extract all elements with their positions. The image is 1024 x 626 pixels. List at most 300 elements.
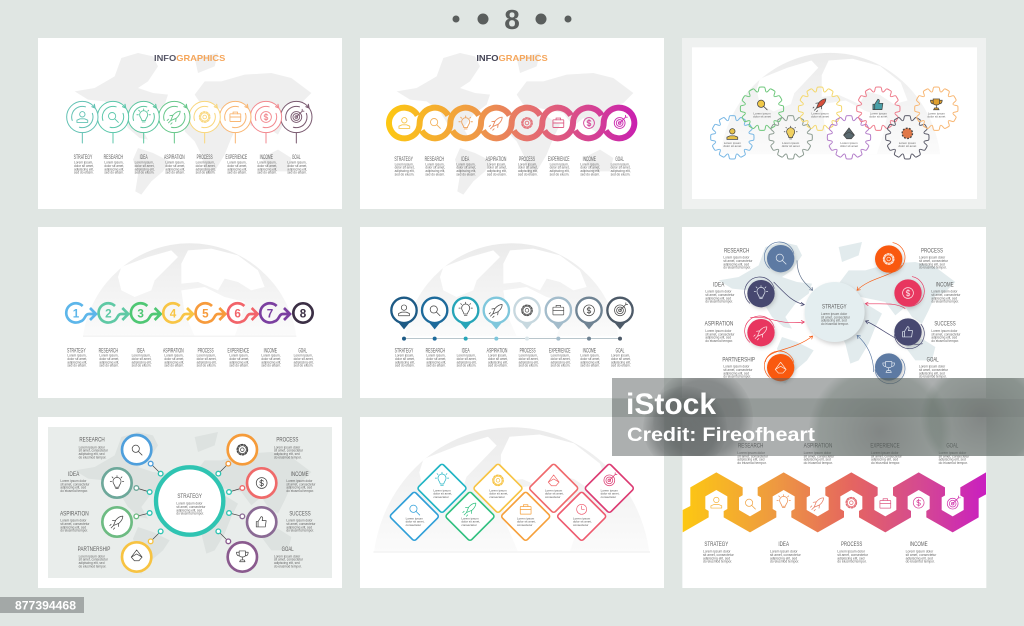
- pins: [391, 298, 633, 329]
- step labels: dolor sit amet,: [197, 357, 217, 361]
- upper labels: sit amet, consectetur: [737, 454, 769, 458]
- step labels: INCOME: [583, 348, 596, 354]
- step labels: sed do eiusm.: [196, 171, 215, 175]
- step labels: PROCESS: [519, 157, 535, 163]
- step labels: Lorem ipsum,: [395, 354, 414, 358]
- node labels: RESEARCH: [79, 437, 105, 444]
- numbered arrows: 8: [300, 307, 307, 320]
- node labels: SUCCESS: [289, 510, 311, 517]
- connector arrows: [750, 260, 923, 372]
- node labels: Lorem ipsum dolor: [60, 479, 86, 483]
- step labels: sed do eiusm.: [227, 171, 247, 175]
- node labels: adipiscing elit, sed: [931, 336, 957, 340]
- timeline line: [404, 338, 620, 340]
- lower labels: sit amet, consectetur: [770, 553, 802, 557]
- step labels: Lorem ipsum,: [74, 161, 93, 165]
- node labels: adipiscing elit, sed: [79, 452, 105, 456]
- ring node: goal: [228, 542, 257, 572]
- step labels: ASPIRATION: [163, 348, 184, 354]
- step labels: adipiscing elit,: [488, 360, 508, 364]
- upper labels: sit amet, consectetur: [871, 454, 903, 458]
- lower labels: do eiusmod tempor.: [770, 560, 799, 564]
- upper labels: EXPERIENCE: [870, 442, 900, 449]
- step labels: dolor sit amet,: [487, 166, 507, 170]
- heading: infographics: INFOGRAPHICS: [476, 53, 548, 63]
- step labels: RESEARCH: [104, 155, 123, 161]
- step labels: dolor sit amet,: [519, 357, 539, 361]
- step labels: dolor sit amet,: [395, 357, 415, 361]
- step labels: dolor sit amet,: [74, 164, 94, 168]
- central node: strategy: Lorem ipsum dolor: [821, 312, 847, 316]
- diamond: partnership: Lorem ipsum: [545, 488, 563, 492]
- central ring: strategy: [156, 467, 223, 535]
- step labels: dolor sit amet,: [518, 166, 538, 170]
- gear: yellow: dolor sit amet: [811, 115, 829, 119]
- step labels: adipiscing elit,: [550, 169, 570, 173]
- step labels: Lorem ipsum,: [261, 354, 281, 358]
- upper labels: Lorem ipsum dolor: [939, 451, 967, 455]
- step labels: sed do eiusm.: [164, 364, 184, 368]
- node labels: adipiscing elit, sed: [931, 296, 957, 300]
- node labels: Lorem ipsum dolor: [705, 329, 731, 333]
- step labels: adipiscing elit,: [425, 169, 445, 173]
- step labels: [394, 157, 631, 176]
- step labels: sed do eiusm.: [165, 171, 185, 175]
- step labels: dolor sit amet,: [257, 164, 277, 168]
- diamond: search: [389, 491, 439, 541]
- step labels: dolor sit amet,: [164, 357, 184, 361]
- step labels: dolor sit amet,: [294, 357, 314, 361]
- node labels: Lorem ipsum dolor: [286, 519, 312, 523]
- lower labels: adipiscing elit, sed: [906, 556, 933, 560]
- step labels: IDEA: [461, 157, 469, 163]
- step labels: IDEA: [462, 348, 470, 354]
- node labels: adipiscing elit, sed: [286, 486, 312, 490]
- diamond: search: consectetur: [406, 523, 421, 527]
- diamond: target: consectetur: [601, 495, 616, 499]
- node labels: do eiusmod tempor.: [723, 266, 751, 270]
- woven ribbon: [389, 108, 634, 138]
- node labels: adipiscing elit, sed: [60, 486, 86, 490]
- circle steps row: [67, 101, 312, 143]
- step labels: Lorem ipsum,: [611, 354, 630, 358]
- upper labels: sit amet, consectetur: [939, 454, 970, 458]
- step labels: dolor sit amet,: [580, 166, 600, 170]
- step labels: Lorem ipsum,: [580, 354, 600, 358]
- diamond: idea: consectetur: [433, 495, 449, 499]
- header: number eight with dots: 8: [504, 4, 520, 35]
- upper labels: adipiscing elit, sed: [804, 458, 831, 462]
- numbered arrows: 5: [202, 307, 209, 320]
- node labels: sit amet, consectetur: [286, 482, 315, 486]
- upper labels: adipiscing elit, sed: [871, 458, 898, 462]
- lower labels: IDEA: [778, 541, 789, 548]
- step labels: Lorem ipsum,: [426, 354, 446, 358]
- upper labels: adipiscing elit, sed: [737, 458, 765, 462]
- panel 2: woven gradient ribbon: [360, 38, 664, 209]
- step labels: sed do eiusm.: [74, 171, 94, 175]
- node labels: do eiusmod tempor.: [274, 455, 302, 459]
- lower labels: adipiscing elit, sed: [703, 556, 730, 560]
- node labels: Lorem ipsum dolor: [723, 256, 749, 260]
- step labels: adipiscing elit,: [197, 360, 217, 364]
- connectors: [136, 464, 242, 541]
- step labels: sed do eiusm.: [135, 171, 154, 175]
- step labels: adipiscing elit,: [519, 360, 539, 364]
- ring node: research: [122, 435, 151, 464]
- step labels: adipiscing elit,: [287, 167, 307, 171]
- panel 7: strategy hub with ring nodes: [38, 417, 342, 588]
- step labels: [67, 348, 314, 368]
- step labels: dolor sit amet,: [551, 357, 571, 361]
- diamond: idea: [417, 463, 467, 513]
- node: success: [888, 313, 930, 355]
- diamond: clock: dolor sit amet,: [573, 520, 592, 524]
- lower labels: adipiscing elit, sed: [837, 556, 865, 560]
- connector dots: [134, 461, 245, 544]
- timeline dots: [402, 337, 622, 341]
- node labels: sit amet, consectetur: [931, 332, 960, 336]
- step labels: adipiscing elit,: [165, 167, 185, 171]
- step labels: dolor sit amet,: [426, 357, 446, 361]
- step labels: STRATEGY: [74, 155, 92, 161]
- central node: strategy: [805, 282, 866, 344]
- node labels: ASPIRATION: [705, 321, 733, 328]
- watermark: credit line: Credit: Fireofheart: [627, 425, 816, 446]
- step labels: dolor sit amet,: [611, 166, 631, 170]
- lower labels: do eiusmod tempor.: [837, 560, 867, 564]
- step labels: sed do eiusm.: [550, 172, 569, 176]
- gear: green: Lorem ipsum: [753, 112, 771, 116]
- node labels: Lorem ipsum dolor: [931, 290, 957, 294]
- gear: blue: dolor sit amet: [723, 144, 741, 148]
- step labels: sed do eiusm.: [611, 364, 631, 368]
- node: idea: [739, 271, 781, 313]
- gear: orange: [915, 87, 958, 130]
- step labels: ASPIRATION: [164, 155, 185, 161]
- node labels: do eiusmod tempor.: [60, 489, 88, 493]
- node labels: sit amet, consectetur: [919, 259, 948, 263]
- step labels: dolor sit amet,: [132, 357, 152, 361]
- diamond: clock: [557, 491, 607, 541]
- watermark: iStock logo text: iStock: [626, 388, 716, 421]
- hexagon ribbon shape: [683, 472, 986, 532]
- node labels: adipiscing elit, sed: [705, 296, 731, 300]
- diamond: gear: consectetur: [489, 495, 505, 499]
- upper labels: Lorem ipsum dolor: [804, 451, 832, 455]
- node labels: Lorem ipsum dolor: [723, 365, 749, 369]
- numbered arrows: 3: [137, 307, 144, 320]
- node: process: [873, 240, 907, 275]
- step labels: Lorem ipsum,: [99, 354, 119, 358]
- central ring: strategy: sit amet, consectetur: [176, 505, 205, 509]
- step labels: sed do eiusm.: [456, 172, 476, 176]
- node labels: sit amet, consectetur: [79, 449, 108, 453]
- diamond: partnership: dolor sit amet,: [545, 492, 564, 496]
- step labels: Lorem ipsum,: [67, 354, 87, 358]
- step labels: adipiscing elit,: [229, 360, 249, 364]
- step labels: sed do eiusm.: [487, 172, 507, 176]
- step labels: sed do eiusm.: [197, 364, 216, 368]
- ring node: process: [228, 435, 257, 464]
- gear: grey green: [769, 116, 812, 159]
- node labels: do eiusmod tempor.: [79, 564, 107, 568]
- gear: pink: dolor sit amet: [869, 115, 887, 119]
- node labels: sit amet, consectetur: [79, 558, 108, 562]
- step labels: adipiscing elit,: [132, 360, 152, 364]
- diamond: rocket: Lorem ipsum: [461, 516, 479, 520]
- diamond: target: dolor sit amet,: [601, 492, 620, 496]
- node labels: adipiscing elit, sed: [705, 336, 731, 340]
- node labels: Lorem ipsum dolor: [79, 445, 105, 449]
- upper labels: sit amet, consectetur: [804, 454, 835, 458]
- node labels: adipiscing elit, sed: [274, 561, 300, 565]
- diamond: briefcase: dolor sit amet,: [517, 520, 536, 524]
- diamond: gear: Lorem ipsum: [489, 488, 507, 492]
- step labels: INCOME: [260, 155, 273, 161]
- step labels: sed do eiusm.: [99, 364, 119, 368]
- node labels: adipiscing elit, sed: [919, 371, 945, 375]
- step labels: dolor sit amet,: [135, 164, 155, 168]
- upper labels: [737, 442, 970, 465]
- node labels: do eiusmod tempor.: [79, 455, 107, 459]
- step labels: adipiscing elit,: [227, 167, 247, 171]
- upper labels: do eiusmod tempor.: [939, 461, 968, 465]
- ring node: success: [247, 507, 276, 537]
- step labels: adipiscing elit,: [395, 360, 415, 364]
- upper labels: Lorem ipsum dolor: [871, 451, 899, 455]
- node labels: PARTNERSHIP: [78, 546, 111, 553]
- node labels: sit amet, consectetur: [705, 332, 734, 336]
- step labels: PROCESS: [197, 155, 213, 161]
- step labels: INCOME: [583, 157, 596, 163]
- diamond: rocket: consectetur: [461, 523, 477, 527]
- panel 8: diamonds over globe: [360, 417, 664, 588]
- upper labels: adipiscing elit, sed: [939, 458, 966, 462]
- node: income: [892, 274, 927, 309]
- upper labels: Lorem ipsum dolor: [737, 451, 766, 455]
- step labels: GOAL: [298, 348, 307, 354]
- numbered arrows: 2: [105, 307, 112, 320]
- diamond: target: Lorem ipsum: [601, 488, 618, 492]
- central node: strategy: sit amet, consectetur: [821, 315, 850, 319]
- central node: strategy: STRATEGY: [822, 304, 847, 311]
- lower labels: sit amet, consectetur: [703, 553, 735, 557]
- node labels: do eiusmod tempor.: [919, 375, 947, 379]
- lower labels: Lorem ipsum dolor: [837, 550, 866, 554]
- lower labels: PROCESS: [841, 541, 863, 548]
- step labels: sed do eiusm.: [132, 364, 151, 368]
- diamond: idea: Lorem ipsum: [433, 488, 451, 492]
- lower labels: sit amet, consectetur: [837, 553, 869, 557]
- step labels: adipiscing elit,: [518, 169, 538, 173]
- step labels: [395, 348, 631, 368]
- step labels: Lorem ipsum,: [197, 354, 216, 358]
- gear: purple: dolor sit amet: [840, 144, 858, 148]
- step labels: Lorem ipsum,: [580, 162, 600, 166]
- step labels: RESEARCH: [425, 157, 444, 163]
- node labels: PARTNERSHIP: [722, 356, 755, 363]
- lower labels: STRATEGY: [704, 541, 729, 548]
- node labels: do eiusmod tempor.: [931, 300, 959, 304]
- gear: green: [740, 87, 784, 130]
- node labels: adipiscing elit, sed: [919, 262, 945, 266]
- central ring: strategy: adipiscing elit, sed: [176, 508, 202, 512]
- step labels: dolor sit amet,: [99, 357, 119, 361]
- diamond: briefcase: [501, 491, 551, 541]
- panel 9: hexagon ribbon: [682, 417, 986, 588]
- ring node: aspiration: [102, 507, 132, 537]
- step labels: EXPERIENCE: [225, 155, 247, 161]
- upper labels: ASPIRATION: [804, 442, 832, 449]
- diamond: partnership: [529, 463, 579, 513]
- node labels: [60, 437, 315, 568]
- step labels: dolor sit amet,: [580, 357, 600, 361]
- gear: blue: Lorem ipsum: [724, 141, 741, 145]
- step labels: Lorem ipsum,: [487, 162, 506, 166]
- node labels: sit amet, consectetur: [919, 368, 948, 372]
- node labels: sit amet, consectetur: [705, 293, 734, 297]
- step labels: dolor sit amet,: [488, 357, 508, 361]
- step labels: adipiscing elit,: [261, 360, 281, 364]
- step labels: adipiscing elit,: [457, 360, 477, 364]
- step labels: adipiscing elit,: [74, 167, 94, 171]
- step labels: Lorem ipsum,: [551, 354, 570, 358]
- step labels: adipiscing elit,: [395, 169, 415, 173]
- node labels: do eiusmod tempor.: [286, 529, 314, 533]
- step labels: Lorem ipsum,: [135, 161, 154, 165]
- gear: dark: [886, 116, 929, 159]
- diamond: gear: [473, 463, 523, 513]
- step labels: Lorem ipsum,: [488, 354, 507, 358]
- image id tag: 877394468: [15, 598, 76, 612]
- lower labels: Lorem ipsum dolor: [703, 550, 731, 554]
- step labels: dolor sit amet,: [165, 164, 185, 168]
- step labels: dolor sit amet,: [611, 357, 631, 361]
- step labels: dolor sit amet,: [67, 357, 87, 361]
- watermark band: [612, 378, 1024, 456]
- step labels: adipiscing elit,: [67, 360, 87, 364]
- step labels: sed do eiusm.: [611, 172, 630, 176]
- numbered arrows: 7: [267, 307, 273, 320]
- central node: strategy: adipiscing elit, sed: [821, 319, 847, 323]
- upper labels: do eiusmod tempor.: [804, 461, 833, 465]
- gear: grey green: dolor sit amet: [782, 144, 800, 148]
- node labels: do eiusmod tempor.: [705, 300, 733, 304]
- step labels: INCOME: [264, 348, 277, 354]
- gear: blue: [711, 116, 754, 159]
- step labels: IDEA: [140, 155, 148, 161]
- lower labels: Lorem ipsum dolor: [770, 550, 798, 554]
- step labels: sed do eiusm.: [395, 172, 414, 176]
- header: number eight with dots: [452, 4, 572, 35]
- node labels: do eiusmod tempor.: [931, 339, 959, 343]
- step labels: dolor sit amet,: [395, 166, 415, 170]
- central ring: strategy: do eiusmod tempor.: [176, 512, 204, 516]
- step labels: adipiscing elit,: [580, 360, 600, 364]
- node labels: do eiusmod tempor.: [723, 375, 751, 379]
- node labels: [705, 247, 960, 379]
- step labels: ASPIRATION: [487, 348, 507, 354]
- step labels: GOAL: [615, 157, 624, 163]
- step labels: Lorem ipsum,: [287, 161, 307, 165]
- step labels: adipiscing elit,: [257, 167, 277, 171]
- numbered arrows: 4: [170, 307, 177, 320]
- node labels: RESEARCH: [724, 247, 749, 254]
- step labels: sed do eiusm.: [257, 171, 277, 175]
- step labels: Lorem ipsum,: [456, 162, 476, 166]
- node labels: sit amet, consectetur: [60, 522, 89, 526]
- step labels: ASPIRATION: [486, 157, 506, 163]
- step labels: IDEA: [137, 348, 145, 354]
- node labels: adipiscing elit, sed: [79, 561, 105, 565]
- step labels: RESEARCH: [426, 348, 445, 354]
- panel 6: strategy hub with solid nodes: [682, 227, 986, 398]
- node: research: [758, 236, 800, 278]
- node labels: sit amet, consectetur: [931, 293, 960, 297]
- step labels: sed do eiusm.: [426, 364, 446, 368]
- lower labels: [703, 541, 937, 564]
- step labels: dolor sit amet,: [457, 357, 477, 361]
- ring node: idea: [102, 468, 132, 498]
- node labels: sit amet, consectetur: [286, 522, 315, 526]
- step labels: dolor sit amet,: [425, 166, 445, 170]
- node labels: adipiscing elit, sed: [723, 262, 749, 266]
- node labels: INCOME: [291, 471, 309, 478]
- white hexagons with icons: [705, 490, 964, 516]
- step labels: adipiscing elit,: [426, 360, 446, 364]
- step labels: sed do eiusm.: [261, 364, 281, 368]
- node labels: do eiusmod tempor.: [919, 266, 947, 270]
- diamond: clock: consectetur: [573, 523, 588, 527]
- step labels: Lorem ipsum,: [611, 162, 630, 166]
- step labels: Lorem ipsum,: [425, 162, 445, 166]
- numbered arrows: 1: [73, 307, 80, 320]
- step labels: sed do eiusm.: [518, 172, 538, 176]
- diamond: rocket: dolor sit amet,: [461, 520, 480, 524]
- node labels: sit amet, consectetur: [723, 259, 752, 263]
- step labels: sed do eiusm.: [287, 171, 307, 175]
- panel 5: map pins timeline: [360, 227, 664, 398]
- step labels: sed do eiusm.: [457, 364, 476, 368]
- panel 4: numbered arrows over globe: [38, 227, 342, 398]
- step labels: adipiscing elit,: [456, 169, 476, 173]
- step labels: RESEARCH: [99, 348, 118, 354]
- step labels: adipiscing elit,: [135, 167, 155, 171]
- gear: pink: Lorem ipsum: [870, 112, 887, 116]
- numbered arrows: 6: [234, 307, 241, 320]
- lower labels: Lorem ipsum dolor: [906, 550, 934, 554]
- step labels: adipiscing elit,: [99, 360, 119, 364]
- upper labels: RESEARCH: [738, 442, 763, 449]
- diamond: target: [584, 463, 634, 513]
- step labels: Lorem ipsum,: [104, 161, 124, 165]
- step labels: dolor sit amet,: [287, 164, 307, 168]
- step labels: dolor sit amet,: [261, 357, 281, 361]
- step labels: dolor sit amet,: [229, 357, 249, 361]
- step labels: Lorem ipsum,: [196, 161, 215, 165]
- step labels: STRATEGY: [67, 348, 86, 354]
- step labels: adipiscing elit,: [551, 360, 571, 364]
- step labels: EXPERIENCE: [549, 348, 571, 354]
- node labels: ASPIRATION: [60, 510, 89, 517]
- step labels: Lorem ipsum,: [227, 161, 247, 165]
- step labels: adipiscing elit,: [611, 360, 631, 364]
- upper labels: GOAL: [946, 442, 959, 449]
- diamond: idea: dolor sit amet,: [433, 492, 452, 496]
- step labels: Lorem ipsum,: [395, 162, 414, 166]
- step labels: Lorem ipsum,: [550, 162, 569, 166]
